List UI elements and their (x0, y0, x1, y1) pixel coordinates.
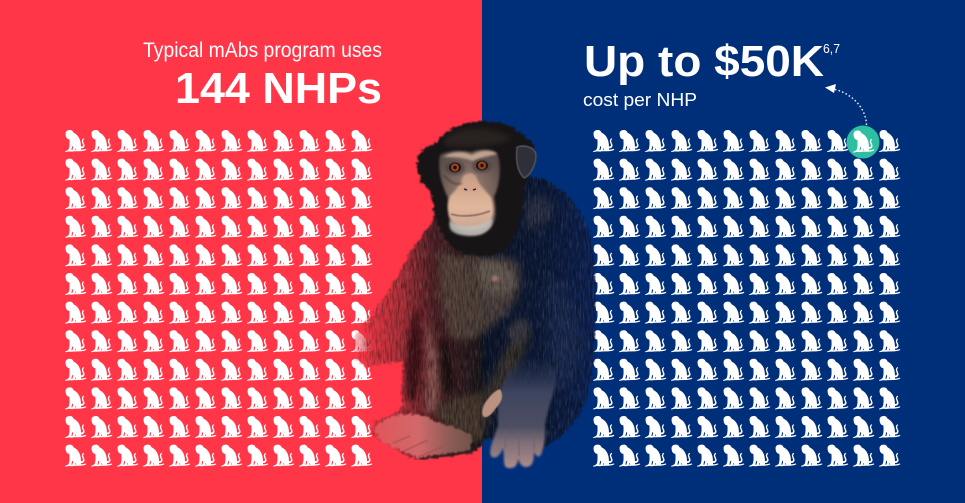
chimp eye socket right (472, 159, 492, 173)
chimp left leg dark band (406, 305, 422, 402)
panel: red background (0, 0, 482, 503)
panel: blue background (482, 0, 965, 503)
chimp eye socket left (445, 161, 465, 175)
chimp finger creases (505, 430, 534, 456)
chimp inner leg shadow (441, 335, 453, 395)
heading: cost per NHP: Up to $50K (584, 37, 824, 86)
chimp outer arm streaks (545, 275, 582, 396)
chimp chest highlight (478, 261, 515, 296)
chimp right ear (517, 146, 536, 178)
chimp chest (438, 250, 520, 340)
chimp foot sole (420, 451, 472, 459)
chimp face (439, 150, 500, 235)
heading: cost per NHP: 6,7 (823, 42, 840, 56)
chimp thumb (482, 389, 502, 417)
chimp nose (461, 182, 478, 192)
chimp nipple (492, 276, 498, 282)
chimp beard (449, 218, 492, 236)
chimp muzzle (448, 173, 493, 230)
heading: typical program: Typical mAbs program uses (143, 39, 382, 62)
chimp eyes (449, 160, 488, 172)
chimp toes (393, 436, 442, 457)
chimp center leg (446, 322, 530, 445)
chimp mouth (451, 211, 490, 216)
icon grid: 144 monkeys right (593, 130, 900, 467)
heading: cost per NHP (583, 37, 840, 110)
illustration: chimpanzee (351, 121, 596, 468)
chimp right hand (490, 358, 556, 468)
chimp left leg light fur (424, 320, 439, 412)
arrow: from highlighted monkey to cost (825, 84, 866, 125)
chimp elbow lump (506, 319, 530, 342)
chimp body (351, 170, 596, 460)
chimp shoulder patch (525, 196, 552, 229)
chimp cheek shadow (444, 175, 462, 184)
heading: typical program: 144 NHPs (175, 64, 382, 113)
icon grid: 144 monkeys left (65, 130, 372, 467)
chimp lower left fur (436, 394, 482, 439)
heading: typical program (143, 39, 382, 113)
chimp foot (375, 414, 472, 458)
icon: highlighted monkey (846, 126, 880, 158)
chimp head top sheen (445, 129, 512, 147)
heading: cost per NHP: cost per NHP (583, 89, 697, 110)
chimp brow (443, 151, 497, 161)
chimp head (417, 121, 536, 256)
